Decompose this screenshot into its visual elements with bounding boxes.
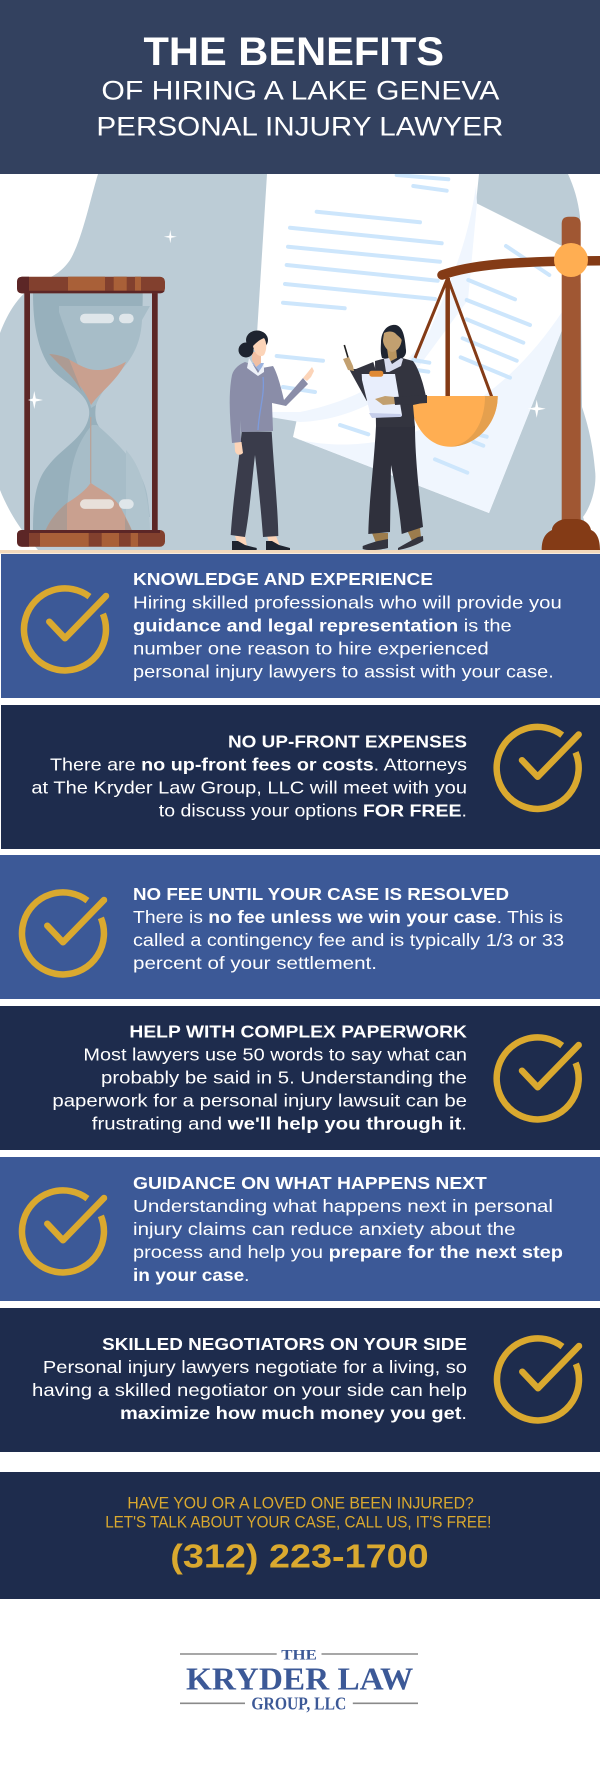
panel: no fee until your case is resolved bbox=[0, 855, 600, 999]
body text: having a skilled negotiator on your side can help bbox=[32, 1380, 467, 1400]
heading: NO UP-FRONT EXPENSES bbox=[228, 731, 467, 751]
icon: check circle bbox=[22, 1190, 104, 1272]
face bbox=[253, 338, 266, 356]
strings bbox=[415, 278, 492, 397]
body text bbox=[133, 1196, 563, 1285]
body text bbox=[31, 754, 467, 820]
icon: check circle bbox=[24, 588, 106, 670]
scale bbox=[410, 217, 600, 550]
call to action banner bbox=[0, 1472, 600, 1599]
neck bbox=[252, 352, 261, 367]
hair bbox=[381, 325, 406, 360]
joint bbox=[554, 243, 588, 277]
heading: SKILLED NEGOTIATORS ON YOUR SIDE bbox=[102, 1334, 467, 1354]
call to action text: HAVE YOU OR A LOVED ONE BEEN INJURED? bbox=[127, 1494, 474, 1512]
paper 2 shaded fold bbox=[293, 312, 562, 513]
logo: the kryder law group: THE bbox=[281, 1647, 317, 1663]
heading: GUIDANCE ON WHAT HAPPENS NEXT bbox=[133, 1173, 487, 1193]
background blob bbox=[0, 174, 595, 550]
hand on clipboard bbox=[375, 396, 395, 405]
sand upper bbox=[49, 354, 126, 405]
body text: Hiring skilled professionals who will provide you bbox=[133, 592, 562, 612]
sparkle 3 bbox=[528, 400, 546, 418]
ground line bbox=[0, 550, 600, 554]
paper 1 bbox=[252, 174, 479, 419]
body text: personal injury lawyers to assist with your case. bbox=[133, 661, 554, 681]
jacket bbox=[375, 358, 427, 427]
panel: skilled negotiators on your side bbox=[0, 1308, 600, 1452]
posts bbox=[24, 290, 30, 532]
shoes bbox=[363, 536, 423, 550]
body text: There are no up-front fees or costs . Attorneys bbox=[50, 754, 467, 774]
icon: check circle bbox=[497, 727, 579, 809]
heading: HELP WITH COMPLEX PAPERWORK bbox=[129, 1021, 467, 1041]
subtitle line 1: OF HIRING A LAKE GENEVA bbox=[101, 75, 499, 105]
face bbox=[383, 332, 402, 352]
collar bbox=[384, 358, 403, 372]
beam bbox=[442, 261, 600, 275]
body text: to discuss your options FOR FREE . bbox=[159, 800, 467, 820]
call to action text: LET'S TALK ABOUT YOUR CASE, CALL US, IT'S FREE! bbox=[105, 1513, 491, 1531]
logo: the kryder law group: GROUP, LLC bbox=[251, 1693, 346, 1713]
icon: check circle bbox=[497, 1338, 579, 1420]
trousers bbox=[231, 432, 278, 537]
illustration: hourglass, lawyers and scale bbox=[0, 174, 600, 554]
paper 2 bbox=[293, 203, 590, 513]
title: the benefits: THE BENEFITS bbox=[144, 30, 444, 74]
raised hand bbox=[303, 367, 314, 381]
subtitle line 2: PERSONAL INJURY LAWYER bbox=[96, 111, 503, 141]
body text: process and help you prepare for the next step bbox=[133, 1242, 563, 1262]
body text: There is no fee unless we win your case . This is bbox=[133, 907, 563, 927]
glass labels bbox=[80, 314, 134, 509]
heading: KNOWLEDGE AND EXPERIENCE bbox=[133, 569, 433, 589]
bottom bar bbox=[17, 530, 165, 547]
body text: paperwork for a personal injury lawsuit can be bbox=[52, 1090, 467, 1110]
icon: check circle bbox=[22, 892, 104, 974]
body text: Understanding what happens next in personal bbox=[133, 1196, 553, 1216]
hair bbox=[238, 342, 254, 358]
icon: check circle bbox=[497, 1037, 579, 1119]
body text: number one reason to hire experienced bbox=[133, 638, 489, 658]
raised hand and pen bbox=[343, 345, 354, 371]
sand stream bbox=[90, 417, 92, 483]
paper text lines bbox=[277, 175, 549, 473]
sand lower bbox=[46, 483, 132, 530]
jacket and arms bbox=[230, 362, 308, 443]
sparkle 1 bbox=[164, 230, 177, 243]
woman in grey suit bbox=[230, 330, 314, 550]
raised sleeve bbox=[349, 362, 380, 401]
body text bbox=[133, 907, 564, 973]
logo: the kryder law group: KRYDER LAW bbox=[186, 1660, 413, 1696]
ankles bbox=[372, 528, 421, 543]
body text bbox=[133, 592, 562, 681]
hand bbox=[234, 442, 243, 455]
trousers bbox=[368, 426, 423, 534]
paper 1 shaded fold bbox=[252, 186, 477, 422]
logo: the kryder law group bbox=[180, 1647, 418, 1713]
glass light panel upper bbox=[59, 306, 150, 408]
phone number: (312) 223-1700 bbox=[170, 1537, 429, 1574]
ankles bbox=[235, 536, 280, 546]
body text: called a contingency fee and is typically 1/3 or 33 bbox=[133, 930, 564, 950]
base bbox=[542, 519, 600, 550]
body text: probably be said in 5. Understanding the bbox=[101, 1067, 467, 1087]
body text: in your case . bbox=[133, 1265, 249, 1285]
body text: percent of your settlement. bbox=[133, 953, 377, 973]
header banner bbox=[0, 0, 600, 174]
neck bbox=[387, 348, 397, 362]
panel: guidance on what happens next bbox=[0, 1157, 600, 1301]
sleeve cuff bbox=[394, 395, 427, 405]
body text: guidance and legal representation is the bbox=[133, 615, 512, 635]
panel: knowledge and experience bbox=[1, 554, 600, 698]
body text: injury claims can reduce anxiety about the bbox=[133, 1219, 516, 1239]
body text: Most lawyers use 50 words to say what can bbox=[83, 1044, 467, 1064]
shoes bbox=[232, 541, 290, 550]
glass light panel lower bbox=[67, 425, 150, 522]
body text: frustrating and we'll help you through it . bbox=[92, 1113, 467, 1133]
collar bbox=[247, 358, 264, 376]
heading: NO FEE UNTIL YOUR CASE IS RESOLVED bbox=[133, 884, 509, 904]
body text: maximize how much money you get . bbox=[120, 1403, 467, 1423]
post bbox=[562, 217, 581, 525]
clip bbox=[369, 371, 383, 377]
woman with clipboard bbox=[343, 325, 427, 550]
blouse and centre seam bbox=[252, 363, 264, 371]
body text bbox=[32, 1357, 467, 1423]
call to action text bbox=[105, 1494, 491, 1531]
clipboard bbox=[362, 374, 402, 417]
glass bbox=[33, 293, 143, 530]
body text bbox=[52, 1044, 467, 1133]
top bar bbox=[17, 277, 165, 293]
hourglass bbox=[17, 277, 165, 547]
panel: help with complex paperwork bbox=[0, 1006, 600, 1150]
body text: at The Kryder Law Group, LLC will meet with you bbox=[31, 777, 467, 797]
body text: Personal injury lawyers negotiate for a living, so bbox=[43, 1357, 467, 1377]
sparkle 2 bbox=[28, 391, 43, 409]
panel: no up-front expenses bbox=[1, 705, 600, 849]
bowl bbox=[410, 396, 498, 447]
